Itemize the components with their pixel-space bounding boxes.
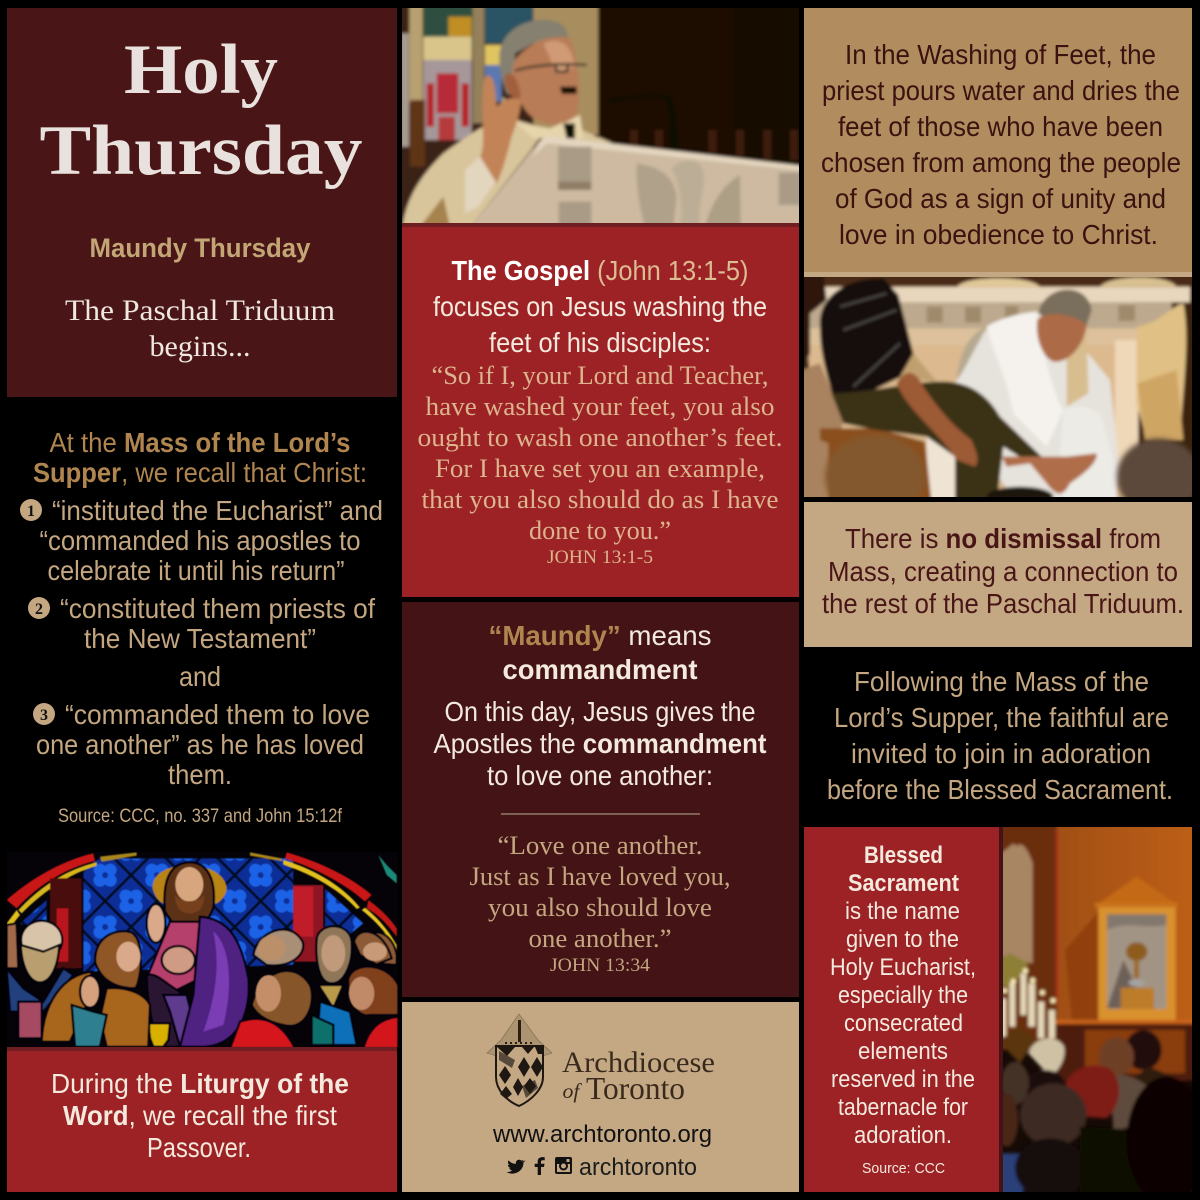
text: first Passover (51, 1068, 349, 1163)
text: The Paschal Triduum begins: The Paschal Triduum (65, 294, 335, 327)
heading: Holy Thursday: Holy (124, 31, 278, 109)
text: on this day: Apostles the commandment (434, 728, 766, 759)
text: no dismissal from Mass: There is no dismissal from (845, 523, 1161, 554)
text: definition: reserved in the (831, 1066, 975, 1093)
quote: John 13: JOHN 13:1-5 (547, 547, 653, 568)
photo: Blessed Sacrament chapel (1003, 827, 1192, 1192)
number badge 1 (20, 499, 42, 521)
panel: Archdiocese of Toronto logo and contact (402, 1002, 799, 1192)
list of three recollections: celebrate it until his return” (48, 555, 344, 586)
text: washing of feet description (821, 39, 1181, 250)
quote: love one another: you also should love (488, 893, 712, 922)
icon: coat of arms (487, 1014, 552, 1106)
quote: love one another: “Love one another. (498, 831, 702, 860)
text: Gospel introduction (433, 255, 767, 358)
text: Gospel introduction: focuses on Jesus washing the (433, 291, 767, 322)
number badge 3 (33, 703, 55, 725)
text: adoration before the Blessed Sacrament: Following the Mass of the (854, 666, 1149, 697)
quote: love one another: Just as I have loved you, (470, 862, 730, 891)
text: first Passover: Word, we recall the first (63, 1100, 337, 1131)
logotype: Archdiocese (562, 1046, 715, 1079)
text: first Passover: During the Liturgy of the (51, 1068, 349, 1099)
text: on this day (434, 696, 766, 791)
text: Gospel introduction: feet of his disciples: (489, 327, 711, 358)
list of three recollections: “commanded his apostles to (40, 525, 360, 556)
quote: John 13: For I have set you an example, (435, 454, 765, 483)
website: www.archtoronto.org (492, 1121, 712, 1148)
text: definition: given to the (846, 926, 959, 953)
icon: instagram (555, 1157, 572, 1174)
panel: Mass of the Lord's Supper text (20, 427, 383, 827)
logotype: of (562, 1079, 583, 1103)
panel: Maundy means commandment (402, 602, 799, 997)
heading: Maundy means commandment: “Maundy” means (488, 620, 712, 651)
list of three recollections: and (179, 661, 221, 692)
panel: The Gospel (402, 227, 799, 597)
heading: Holy Thursday: Thursday (40, 112, 362, 190)
panel: Washing of Feet (804, 8, 1192, 272)
text: definition: especially the (838, 982, 968, 1009)
list of three recollections: “commanded them to love (65, 699, 370, 730)
divider band under photo (402, 223, 799, 227)
text: The Paschal Triduum begins (65, 294, 335, 363)
text: on this day: On this day, Jesus gives the (444, 696, 756, 727)
text: definition: adoration. (854, 1122, 952, 1149)
text: on this day: to love one another: (487, 760, 713, 791)
photo: stained glass of Christ and the apostles (7, 852, 398, 1048)
text: adoration before the Blessed Sacrament: invited to join in adoration (851, 738, 1151, 769)
text: definition: consecrated (844, 1010, 963, 1037)
quote: love one another: JOHN 13:34 (550, 955, 651, 976)
text: no dismissal from Mass (822, 523, 1184, 619)
list of three recollections: one another” as he has loved (36, 729, 364, 760)
text: washing of feet description: feet of those who have been (838, 111, 1163, 142)
panel: Blessed Sacrament definition (804, 827, 999, 1192)
social handle: archtoronto (579, 1154, 697, 1181)
source note: Source: CCC, no. 337 and John 15:12f (58, 806, 343, 827)
number badge 3: 3 (40, 707, 48, 724)
text: definition: Blessed (864, 842, 943, 869)
text: washing of feet description: chosen from among the people (821, 147, 1181, 178)
list of three recollections: “constituted them priests of (60, 593, 375, 624)
text: definition: Holy Eucharist, (830, 954, 976, 981)
text: definition: tabernacle for (838, 1094, 968, 1121)
heading: Maundy means commandment (488, 620, 712, 685)
intro text (33, 427, 367, 488)
text: adoration before the Blessed Sacrament (827, 666, 1173, 805)
text: no dismissal from Mass: Mass, creating a connection to (828, 556, 1178, 587)
panel: no dismissal (804, 502, 1192, 647)
text: first Passover: Passover. (147, 1132, 251, 1163)
list of three recollections: them. (168, 759, 232, 790)
text: adoration before the Blessed Sacrament: before the Blessed Sacrament. (827, 774, 1173, 805)
text: washing of feet description: love in obedience to Christ. (839, 219, 1158, 250)
source note: Source: CCC (862, 1160, 945, 1177)
icon: facebook (535, 1157, 545, 1175)
number badge 2: 2 (35, 601, 43, 618)
list of three recollections: the New Testament” (84, 623, 316, 654)
panel: title (7, 8, 397, 397)
divider band above photo (804, 272, 1192, 277)
quote: John 13: done to you.” (529, 516, 671, 545)
photo: priest washing feet (804, 277, 1192, 497)
quote: John 13: have washed your feet, you also (426, 392, 774, 421)
text: definition (830, 842, 976, 1149)
text: The Paschal Triduum begins: begins... (150, 330, 250, 363)
quote: John 13: ought to wash one another’s feet. (418, 423, 782, 452)
list of three recollections (20, 495, 383, 790)
text: definition: Sacrament (848, 870, 959, 897)
intro text: At the Mass of the Lord’s (50, 427, 350, 458)
quote: John 13: that you also should do as I have (422, 485, 778, 514)
quote: love one another: one another.” (528, 924, 672, 953)
number badge 1: 1 (27, 503, 35, 520)
logotype (562, 1046, 715, 1106)
quote: love one another (470, 831, 730, 976)
subheading: Maundy Thursday: Maundy Thursday (90, 233, 310, 263)
logotype: Toronto (586, 1070, 685, 1106)
text: adoration before the Blessed Sacrament: Lord’s Supper, the faithful are (834, 702, 1169, 733)
number badge 2 (28, 597, 50, 619)
heading: Holy Thursday (40, 31, 362, 190)
text: definition: elements (858, 1038, 948, 1065)
text: definition: is the name (845, 898, 960, 925)
text: washing of feet description: of God as a sign of unity and (835, 183, 1166, 214)
list of three recollections: “instituted the Eucharist” and (52, 495, 383, 526)
text: Gospel introduction: The Gospel (John 13:1-5) (452, 255, 748, 286)
quote: John 13 (418, 361, 782, 568)
quote: John 13: “So if I, your Lord and Teacher, (432, 361, 768, 390)
icon: twitter (506, 1160, 526, 1174)
photo: priest preaching at the ambo (400, 3, 803, 230)
heading: Maundy means commandment: commandment (502, 654, 698, 685)
intro text: Supper, we recall that Christ: (33, 457, 367, 488)
text: washing of feet description: In the Washing of Feet, the (845, 39, 1156, 70)
panel: Liturgy of the Word (7, 1047, 397, 1192)
